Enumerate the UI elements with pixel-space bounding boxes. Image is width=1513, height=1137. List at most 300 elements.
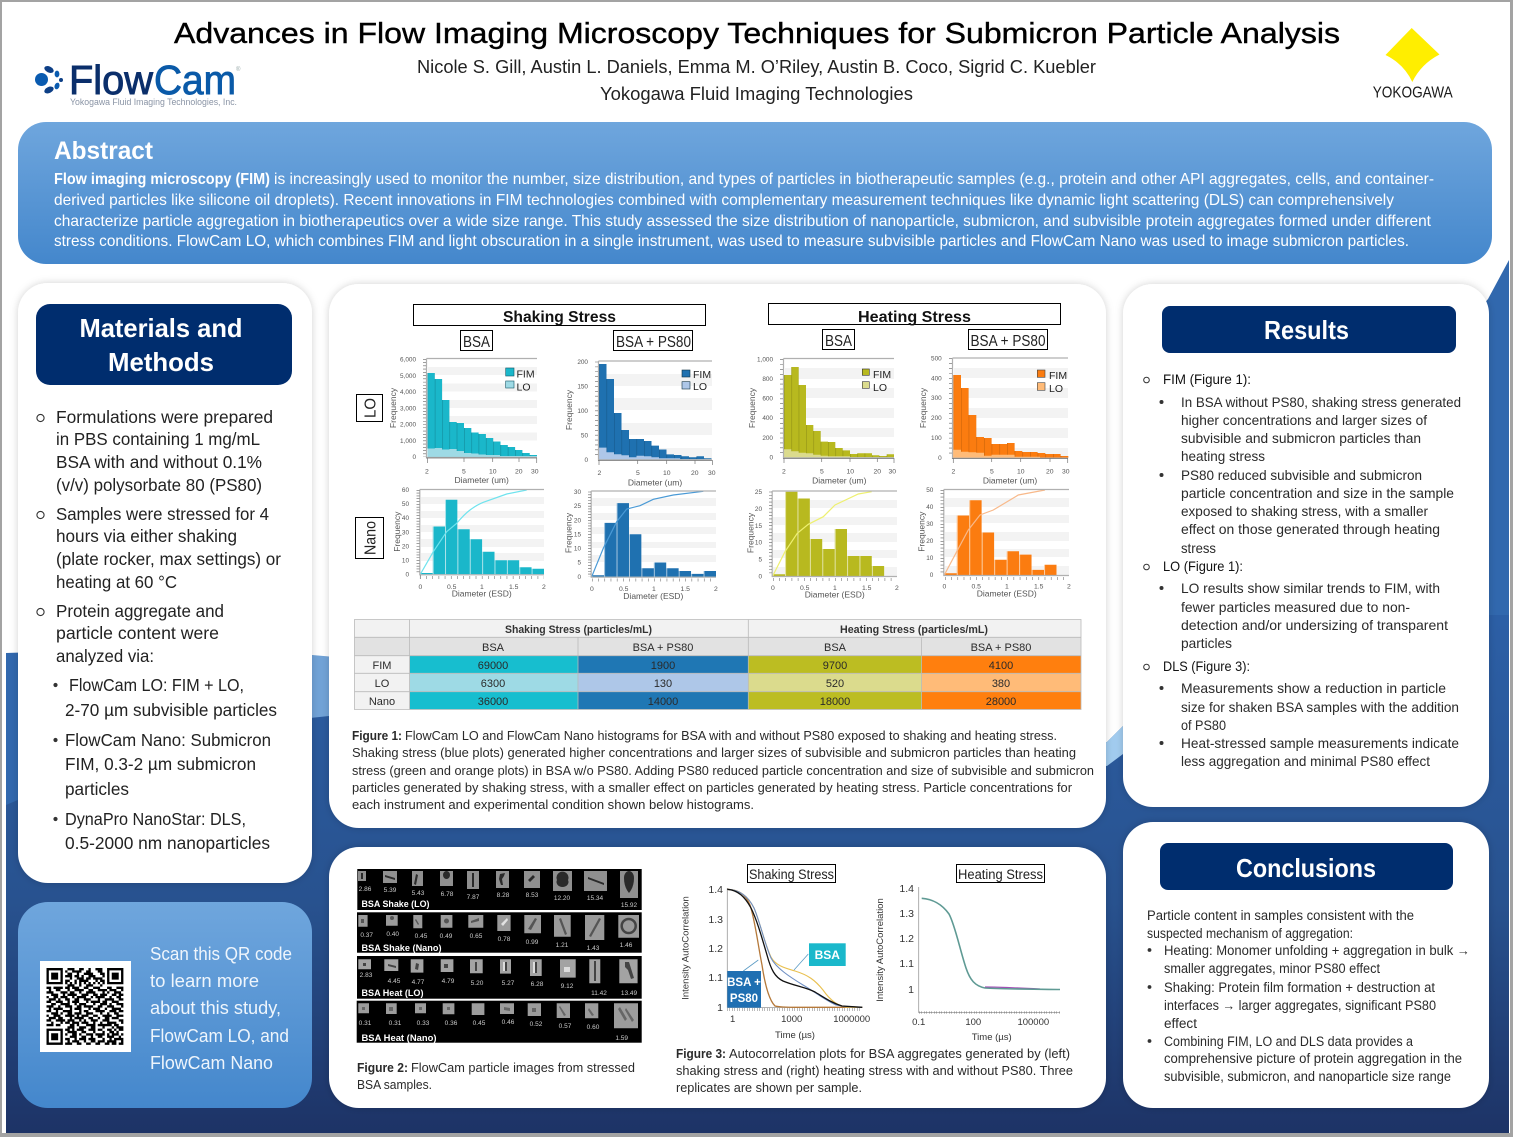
results list: size for shaken BSA samples with the addition — [1181, 700, 1459, 715]
chart: heating BSA+PS80 LO histogram: 2 — [952, 468, 956, 475]
figure 2: particle image gallery: 1.21 — [556, 942, 569, 949]
chart: heating BSA LO histogram: 400 — [762, 415, 773, 422]
abstract body text: Flow imaging microscopy (FIM) — [54, 171, 270, 188]
chart: shaking stress autocorrelation — [680, 864, 870, 1041]
chart: shaking BSA+PS80 Nano histogram: 1 — [652, 586, 656, 593]
figure 2: particle image gallery: BSA Heat (LO) — [362, 988, 424, 999]
chart: heating stress autocorrelation: Intensity AutoCorrelation — [875, 898, 886, 1002]
results list: In BSA without PS80, shaking stress generated — [1181, 395, 1461, 410]
abstract body text — [54, 171, 1434, 250]
figure 2: particle image gallery: 12.20 — [554, 895, 571, 902]
table: particle concentrations: 9700 — [823, 660, 847, 672]
methods list: particles — [65, 779, 129, 799]
callout: BSA + PS80: PS80 — [730, 993, 758, 1005]
column label: heating BSA + PS80: BSA + PS80 — [970, 333, 1046, 350]
title: Advances in Flow Imaging Microscopy Techniques for Submicron Particle Analysis — [174, 18, 1340, 50]
table: particle concentrations: 36000 — [478, 696, 508, 708]
chart: shaking stress autocorrelation: 1.1 — [708, 972, 723, 984]
chart: shaking BSA+PS80 Nano histogram: 15 — [574, 532, 581, 538]
chart: heating BSA Nano histogram: 2 — [895, 585, 899, 592]
figure 2: particle image gallery: 5.43 — [412, 890, 425, 897]
results list: DLS (Figure 3): — [1163, 659, 1250, 674]
methods list: FIM, 0.3-2 µm submicron — [65, 754, 256, 774]
chart: heating stress autocorrelation: Time (µs) — [972, 1032, 1012, 1043]
heading: Heating Stress: Heating Stress — [858, 309, 971, 326]
results list: less aggregation and minimal PS80 effect — [1181, 754, 1430, 769]
chart: heating BSA LO histogram — [747, 356, 896, 485]
results heading — [1162, 306, 1456, 353]
figure 2: particle image gallery: 2.86 — [359, 886, 372, 893]
figure 2 caption: Figure 2: — [357, 1061, 408, 1075]
figure 2: particle image gallery: 15.34 — [587, 895, 604, 902]
chart: shaking BSA+PS80 LO histogram — [564, 359, 716, 488]
conclusions text: smaller aggregates, minor PS80 effect — [1164, 961, 1380, 976]
callout: BSA: BSA — [815, 948, 840, 962]
chart: shaking BSA LO histogram: 2,000 — [400, 422, 416, 428]
chart: shaking stress autocorrelation: 1 — [730, 1014, 735, 1025]
results list: higher concentrations and larger sizes of — [1181, 413, 1427, 428]
chart: heating BSA LO histogram: 5 — [820, 468, 824, 475]
chart: shaking BSA Nano histogram — [392, 487, 546, 599]
chart: shaking BSA Nano histogram: 40 — [402, 515, 409, 522]
icon: QR code — [40, 961, 131, 1052]
abstract heading: Abstract — [54, 137, 154, 165]
chart: shaking BSA+PS80 LO histogram: 100 — [577, 408, 588, 415]
conclusions text: suspected mechanism of aggregation: — [1147, 926, 1353, 941]
figure 1 caption: FlowCam LO and FlowCam Nano histograms for BSA with and without PS80 exposed to shaking and heating stress. — [405, 729, 1057, 743]
results list: effect on those generated through heating — [1181, 522, 1440, 537]
table: particle concentrations: 520 — [826, 678, 844, 690]
methods list: (plate rocker, max settings) or — [56, 549, 281, 569]
chart: heating BSA Nano histogram: 5 — [758, 556, 762, 564]
figure 3 caption: Figure 3: — [676, 1047, 726, 1061]
logo: FlowCam: ® — [236, 66, 241, 73]
chart: shaking stress autocorrelation: 1.4 — [708, 884, 723, 896]
chart: shaking BSA+PS80 LO histogram: 200 — [577, 359, 588, 366]
methods list: BSA with and without 0.1% — [56, 452, 262, 472]
results list: detection and/or undersizing of transparent — [1181, 618, 1448, 633]
figure 2: particle image gallery: 0.52 — [530, 1021, 543, 1028]
methods list: FlowCam LO: FIM + LO, — [69, 675, 244, 695]
abstract body text: derived particles like silicone oil droplets). Recent innovations in FIM technologies combined with complementary measurement techniques like dynamic light scattering (DLS) can comprehensively — [54, 192, 1394, 209]
table: particle concentrations: 28000 — [986, 696, 1016, 708]
abstract body text: characterize particle aggregation in biotherapeutics over a wide size range. This study assessed the size distribution of nanoparticle, submicron, and subvisible protein aggregates formed under different — [54, 213, 1432, 230]
figure 2: particle image gallery: 8.53 — [526, 892, 539, 899]
chart: shaking BSA+PS80 Nano histogram: 30 — [574, 489, 581, 496]
chart: heating BSA Nano histogram — [746, 489, 899, 600]
results list: LO (Figure 1): — [1163, 559, 1243, 574]
chart: shaking BSA Nano histogram: 0.5 — [447, 584, 457, 591]
chart: shaking BSA+PS80 LO histogram: 20 — [691, 470, 699, 477]
results list: particle concentration and size in the sample — [1181, 486, 1454, 501]
chart: heating BSA+PS80 LO histogram: 300 — [931, 395, 942, 402]
chart: heating BSA+PS80 Nano histogram: 50 — [926, 487, 934, 494]
table: particle concentrations: Shaking Stress (particles/mL) — [505, 624, 652, 636]
chart: shaking BSA+PS80 Nano histogram: Frequency — [564, 512, 574, 553]
chart: heating BSA Nano histogram: 1 — [833, 585, 837, 592]
methods list: Formulations were prepared — [56, 407, 273, 427]
conclusions text — [1147, 908, 1470, 1084]
chart: shaking BSA+PS80 LO histogram: FIM — [693, 369, 711, 381]
chart: heating BSA+PS80 LO histogram — [918, 356, 1070, 485]
chart: shaking BSA LO histogram: 30 — [531, 468, 539, 475]
results list: LO results show similar trends to FIM, with — [1181, 581, 1440, 596]
figure 2: particle image gallery: 8.28 — [497, 892, 510, 899]
methods list: in PBS containing 1 mg/mL — [56, 429, 260, 449]
table: particle concentrations: BSA — [482, 642, 505, 654]
conclusions text: Particle content in samples consistent with the — [1147, 908, 1414, 923]
chart: shaking BSA+PS80 Nano histogram: 0.5 — [619, 586, 629, 593]
chart: shaking BSA+PS80 Nano histogram — [564, 489, 718, 601]
logo: Yokogawa — [1373, 28, 1453, 102]
chart: heating BSA LO histogram: FIM — [873, 369, 891, 381]
logo: FlowCam — [35, 57, 241, 107]
chart: shaking BSA+PS80 Nano histogram: Diameter (ESD) — [623, 591, 683, 601]
chart: shaking BSA Nano histogram: Diameter (ESD) — [452, 589, 512, 599]
logo: FlowCam: Cam — [154, 57, 236, 103]
callout: BSA — [809, 943, 846, 966]
chart: heating BSA+PS80 LO histogram: 5 — [990, 468, 994, 475]
methods list: 2-70 µm subvisible particles — [65, 700, 277, 720]
materials and methods heading: Methods — [108, 347, 214, 377]
conclusions text: comprehensive picture of protein aggregation in the — [1164, 1051, 1462, 1066]
chart: shaking BSA+PS80 LO histogram: LO — [693, 381, 707, 393]
conclusions heading — [1160, 843, 1453, 890]
heading: Heating Stress — [768, 304, 1060, 326]
conclusions text: Combining FIM, LO and DLS data provides a — [1164, 1034, 1414, 1049]
chart: shaking BSA+PS80 Nano histogram: 2 — [714, 586, 718, 593]
chart: shaking BSA Nano histogram: Frequency — [392, 511, 402, 552]
materials and methods heading — [36, 304, 292, 385]
results list: Measurements show a reduction in particle — [1181, 681, 1446, 696]
QR text: to learn more — [150, 970, 259, 991]
logo: FlowCam: Yokogawa Fluid Imaging Technologies, Inc. — [70, 97, 237, 107]
figure 1 caption: particles generated by shaking stress, with a smaller effect on particles generated by heating stress. Particle concentrations for — [352, 781, 1072, 795]
chart: heating stress autocorrelation: 100000 — [1017, 1017, 1049, 1028]
figure 3 caption: Autocorrelation plots for BSA aggregates generated by (left) — [729, 1047, 1070, 1061]
table: particle concentrations: FIM — [373, 660, 391, 672]
panel: figure 1 — [329, 284, 1106, 828]
chart: heating BSA Nano histogram: 0 — [758, 574, 762, 580]
figure 2: particle image gallery: 0.78 — [498, 936, 511, 943]
chart: shaking BSA+PS80 LO histogram: 5 — [636, 470, 640, 477]
methods list: analyzed via: — [56, 646, 154, 666]
figure 3 caption: shaking stress and (right) heating stress with and without PS80. Three — [676, 1064, 1073, 1078]
table: particle concentrations: Nano — [369, 696, 395, 708]
methods list: DynaPro NanoStar: DLS, — [65, 809, 246, 829]
column label: heating BSA: BSA — [825, 333, 853, 350]
chart: shaking BSA Nano histogram: 50 — [402, 501, 409, 508]
figure 2: particle image gallery: 4.77 — [412, 979, 425, 986]
table: particle concentrations: LO — [375, 678, 390, 690]
conclusions heading: Conclusions — [1236, 853, 1376, 883]
chart: shaking BSA Nano histogram: 0 — [418, 584, 422, 591]
results list — [1144, 372, 1461, 769]
figure 3 caption — [676, 1047, 1073, 1095]
figure 2: particle image gallery: 0.37 — [360, 932, 373, 939]
chart: shaking BSA LO histogram: 20 — [515, 468, 523, 475]
chart: heating BSA+PS80 LO histogram: Diameter (um) — [983, 475, 1037, 485]
table: particle concentrations: 14000 — [648, 696, 678, 708]
row label: LO — [356, 394, 382, 422]
figure 2: particle image gallery: 0.33 — [417, 1020, 430, 1027]
chart: heating BSA Nano histogram: 10 — [755, 540, 762, 546]
chart: heating BSA+PS80 Nano histogram: 0.5 — [972, 583, 981, 590]
figure 1 caption — [352, 729, 1094, 812]
table: particle concentrations: 1900 — [651, 660, 675, 672]
conclusions text: Heating: Monomer unfolding + aggregation in bulk → — [1164, 943, 1470, 958]
methods list: 0.5-2000 nm nanoparticles — [65, 833, 270, 853]
figure 2: particle image gallery: 4.45 — [388, 978, 401, 985]
chart: heating BSA LO histogram: 10 — [846, 468, 854, 475]
chart: heating BSA+PS80 Nano histogram: 30 — [926, 521, 934, 528]
chart: heating BSA LO histogram: 600 — [762, 396, 773, 402]
methods list: (v/v) polysorbate 80 (PS80) — [56, 475, 262, 495]
conclusions text: Shaking: Protein film formation + destruction at — [1164, 980, 1435, 995]
panel: conclusions — [1123, 822, 1489, 1108]
chart: heating BSA+PS80 Nano histogram: 1.5 — [1034, 583, 1044, 590]
results heading: Results — [1264, 315, 1349, 345]
chart: shaking BSA LO histogram: 4,000 — [400, 389, 416, 396]
methods list: Samples were stressed for 4 — [56, 504, 269, 524]
chart: heating BSA Nano histogram: 0 — [771, 585, 775, 592]
figure 2: particle image gallery: 0.31 — [359, 1020, 372, 1027]
chart: heating BSA+PS80 LO histogram: 20 — [1046, 468, 1054, 475]
chart: heating stress autocorrelation: 1 — [908, 984, 914, 996]
figure 2: particle image gallery: 6.28 — [531, 981, 544, 988]
table: particle concentrations: 380 — [992, 678, 1010, 690]
materials and methods heading: Materials and — [80, 313, 242, 343]
chart: shaking stress autocorrelation: Time (µs) — [775, 1030, 815, 1041]
figure 2: particle image gallery: 0.45 — [415, 933, 428, 940]
figure 2: particle image gallery: 0.31 — [389, 1020, 402, 1027]
chart: heating BSA Nano histogram: 1.5 — [862, 585, 872, 592]
chart: shaking stress autocorrelation: Intensity AutoCorrelation — [680, 896, 692, 1000]
chart: shaking BSA LO histogram: 6,000 — [400, 356, 416, 364]
figure 2: particle image gallery: 15.92 — [621, 902, 638, 909]
chart: shaking BSA+PS80 LO histogram: 30 — [708, 470, 716, 477]
chart: shaking BSA LO histogram: Diameter (um) — [455, 475, 509, 485]
table: particle concentrations: BSA — [824, 642, 847, 654]
chart: heating BSA+PS80 LO histogram: 100 — [931, 435, 942, 442]
chart: shaking stress autocorrelation: 1 — [717, 1002, 723, 1014]
chart: heating BSA+PS80 LO histogram: 0 — [938, 455, 942, 462]
panel: results — [1123, 284, 1489, 807]
figure 1 caption: stress (green and orange plots) in BSA w/o PS80. Adding PS80 reduced particle concentration and size of subvisible and submicron — [352, 764, 1094, 778]
chart: heating stress autocorrelation: 1.4 — [899, 883, 914, 895]
chart: heating stress autocorrelation: 1.1 — [899, 958, 914, 970]
chart: shaking BSA+PS80 Nano histogram: 5 — [577, 560, 581, 566]
table: particle concentrations: 4100 — [989, 660, 1013, 672]
chart: shaking stress autocorrelation: 1000000 — [833, 1014, 870, 1025]
chart: shaking stress autocorrelation: 1.2 — [708, 943, 723, 955]
chart: heating BSA Nano histogram: 25 — [755, 489, 762, 496]
QR text: Scan this QR code — [150, 943, 292, 964]
panel: abstract — [18, 122, 1492, 264]
figure 2: particle image gallery: 0.36 — [445, 1020, 458, 1027]
QR text — [150, 943, 292, 1073]
table: particle concentrations: BSA + PS80 — [971, 642, 1031, 654]
chart: heating BSA LO histogram: 800 — [762, 376, 773, 383]
methods list: hours via either shaking — [56, 526, 237, 546]
figure 2: particle image gallery: 13.49 — [621, 990, 638, 997]
figure 2: particle image gallery: 2.83 — [360, 972, 373, 979]
QR text: FlowCam LO, and — [150, 1025, 289, 1046]
table: particle concentrations — [354, 619, 1081, 710]
chart: heating BSA+PS80 Nano histogram: 40 — [926, 504, 934, 511]
column label: shaking BSA: BSA — [463, 334, 491, 351]
results list: stress — [1181, 541, 1216, 556]
methods list: Protein aggregate and — [56, 601, 224, 621]
chart: heating stress autocorrelation: Heating Stress — [958, 867, 1043, 882]
figure 2: particle image gallery: 0.99 — [526, 939, 539, 946]
chart: heating BSA LO histogram: 1,000 — [757, 356, 773, 364]
logo: Yokogawa: YOKOGAWA — [1373, 84, 1453, 102]
chart: heating BSA+PS80 LO histogram: FIM — [1049, 370, 1067, 382]
row label: Nano — [356, 518, 384, 558]
chart: heating stress autocorrelation: 0.1 — [912, 1017, 925, 1028]
chart: heating stress autocorrelation — [875, 864, 1060, 1043]
chart: shaking BSA LO histogram: LO — [516, 382, 531, 394]
abstract body text: stress conditions. FlowCam LO, which combines FIM and light obscuration in a single instrument, was used to measure subvisible particles and FlowCam Nano was used to image submicron particles. — [54, 233, 1409, 250]
table: particle concentrations: 18000 — [820, 696, 850, 708]
figure 3 caption: replicates are shown per sample. — [676, 1081, 862, 1095]
row label: Nano: Nano — [362, 521, 380, 555]
chart: shaking BSA LO histogram: 3,000 — [400, 406, 416, 412]
conclusions text: interfaces → larger aggregates, significant PS80 — [1164, 998, 1436, 1013]
chart: shaking BSA+PS80 LO histogram: 150 — [577, 384, 588, 390]
chart: heating BSA Nano histogram: Diameter (ESD) — [805, 590, 865, 600]
chart: shaking BSA Nano histogram: 30 — [402, 530, 409, 536]
logo: FlowCam: Flow — [69, 57, 153, 103]
figure 1 caption: each instrument and experimental condition shown below histograms. — [352, 798, 754, 812]
chart: shaking BSA+PS80 Nano histogram: 25 — [574, 503, 581, 510]
chart: heating BSA LO histogram: LO — [873, 382, 887, 394]
figure 2: particle image gallery: 6.78 — [441, 891, 454, 898]
chart: shaking stress autocorrelation: Shaking Stress — [749, 867, 834, 882]
results list: of PS80 — [1181, 718, 1226, 733]
chart: heating BSA Nano histogram: 0.5 — [800, 585, 810, 592]
chart: heating BSA LO histogram: 20 — [874, 468, 881, 475]
callout: BSA + PS80: BSA + — [727, 977, 761, 989]
chart: shaking BSA Nano histogram: 10 — [402, 558, 409, 564]
figure 1 caption: Figure 1: — [352, 729, 402, 743]
chart: heating BSA+PS80 Nano histogram: 20 — [926, 538, 934, 545]
chart: heating BSA+PS80 LO histogram: 200 — [931, 415, 942, 422]
figure 2 caption — [357, 1061, 635, 1092]
chart: shaking BSA LO histogram: 10 — [489, 468, 497, 475]
chart: shaking stress autocorrelation: 1.3 — [708, 914, 723, 926]
figure 2: particle image gallery: 0.49 — [440, 933, 453, 940]
figure 2: particle image gallery: 1.46 — [620, 942, 633, 949]
QR text: about this study, — [150, 997, 281, 1018]
methods list: FlowCam Nano: Submicron — [65, 730, 271, 750]
figure 2: particle image gallery: BSA Shake (Nano) — [362, 943, 442, 954]
chart: shaking BSA+PS80 Nano histogram: 10 — [574, 546, 581, 552]
chart: shaking BSA LO histogram: FIM — [516, 368, 535, 380]
row label: LO: LO — [362, 398, 380, 418]
table: particle concentrations: 69000 — [478, 660, 508, 672]
chart: heating BSA LO histogram: Diameter (um) — [812, 475, 867, 485]
table: particle concentrations: 130 — [654, 678, 672, 690]
callout: BSA + PS80 — [727, 971, 761, 1008]
chart: shaking BSA LO histogram: 5,000 — [400, 373, 416, 380]
figure 1 caption: Shaking stress (blue plots) generated higher concentrations and larger sizes of subvisible and submicron particles than heating — [352, 746, 1076, 760]
methods list — [37, 407, 281, 853]
results list: Heat-stressed sample measurements indicate — [1181, 736, 1459, 751]
chart: shaking BSA LO histogram: 2 — [425, 468, 429, 475]
figure 2: particle image gallery: 0.60 — [587, 1024, 600, 1031]
chart: shaking BSA Nano histogram: 1 — [480, 584, 484, 591]
figure 2: particle image gallery: 0.65 — [470, 933, 483, 940]
figure 2: particle image gallery: 9.12 — [561, 983, 574, 990]
QR text: FlowCam Nano — [150, 1052, 273, 1073]
chart: shaking BSA Nano histogram: 2 — [542, 584, 546, 591]
chart: heating stress autocorrelation: 1.2 — [899, 933, 914, 945]
chart: heating BSA LO histogram: 200 — [762, 435, 773, 442]
chart: heating BSA+PS80 LO histogram: 10 — [1017, 468, 1025, 475]
chart: heating BSA+PS80 Nano histogram: 0 — [942, 583, 946, 590]
table: particle concentrations: BSA + PS80 — [633, 642, 693, 654]
chart: shaking BSA Nano histogram: 20 — [402, 544, 409, 550]
chart: shaking BSA+PS80 Nano histogram: 0 — [590, 586, 594, 593]
chart: heating BSA LO histogram: 2 — [782, 468, 786, 475]
chart: heating BSA LO histogram: 30 — [888, 468, 896, 475]
chart: heating BSA+PS80 LO histogram: Frequency — [918, 387, 928, 428]
table: particle concentrations: 6300 — [481, 678, 505, 690]
chart: shaking BSA LO histogram: 5 — [462, 468, 466, 475]
chart: shaking BSA LO histogram: 0 — [412, 454, 416, 461]
heading: Shaking Stress: Shaking Stress — [503, 309, 616, 326]
chart: shaking BSA+PS80 Nano histogram: 0 — [577, 574, 581, 581]
figure 2: particle image gallery: 0.45 — [473, 1020, 486, 1027]
chart: heating BSA+PS80 Nano histogram: 0 — [930, 572, 934, 579]
results list: heating stress — [1181, 449, 1265, 464]
chart: heating BSA+PS80 LO histogram: 500 — [931, 356, 942, 362]
chart: heating BSA+PS80 Nano histogram: 1 — [1005, 583, 1009, 590]
chart: heating BSA+PS80 LO histogram: LO — [1049, 383, 1063, 395]
chart: shaking BSA+PS80 LO histogram: Diameter (um) — [628, 478, 682, 488]
figure 2: particle image gallery: 1.43 — [587, 945, 600, 952]
chart: heating BSA Nano histogram: 20 — [755, 506, 762, 513]
chart: heating BSA Nano histogram: 15 — [755, 523, 762, 530]
abstract body text: is increasingly used to monitor the number, size distribution, and types of particles in biotherapeutic samples (e.g., protein and other API aggregates, cells, and container- — [274, 171, 1434, 188]
chart: shaking BSA Nano histogram: 0 — [405, 572, 409, 578]
table: particle concentrations: Heating Stress (particles/mL) — [840, 624, 988, 636]
chart: shaking stress autocorrelation: 1000 — [781, 1014, 802, 1025]
results list: FIM (Figure 1): — [1163, 372, 1251, 387]
chart: heating BSA+PS80 Nano histogram: 2 — [1067, 583, 1071, 590]
panel: QR code — [18, 902, 312, 1108]
chart: shaking BSA Nano histogram: 1.5 — [509, 584, 519, 591]
chart: heating BSA+PS80 Nano histogram: 10 — [926, 555, 934, 562]
figure 2: particle image gallery — [357, 869, 642, 1044]
figure 2: particle image gallery: 5.20 — [471, 980, 484, 987]
chart: shaking BSA+PS80 LO histogram: Frequency — [564, 389, 574, 430]
chart: shaking BSA+PS80 Nano histogram: 20 — [574, 518, 581, 524]
chart: heating BSA+PS80 Nano histogram — [916, 487, 1071, 599]
results list: exposed to shaking stress, with a smaller — [1181, 504, 1428, 519]
figure 2: particle image gallery: 5.27 — [502, 980, 515, 987]
heading: Shaking Stress — [414, 304, 706, 326]
figure 2: particle image gallery: 0.57 — [559, 1023, 572, 1030]
figure 2: particle image gallery: 1.59 — [615, 1035, 628, 1042]
conclusions text: subvisible, submicron, and nanoparticle size range — [1164, 1069, 1451, 1084]
chart: shaking BSA LO histogram: Frequency — [388, 387, 398, 428]
methods list: heating at 60 °C — [56, 572, 177, 592]
chart: heating BSA Nano histogram: Frequency — [746, 512, 756, 553]
chart: shaking BSA LO histogram — [388, 356, 539, 485]
